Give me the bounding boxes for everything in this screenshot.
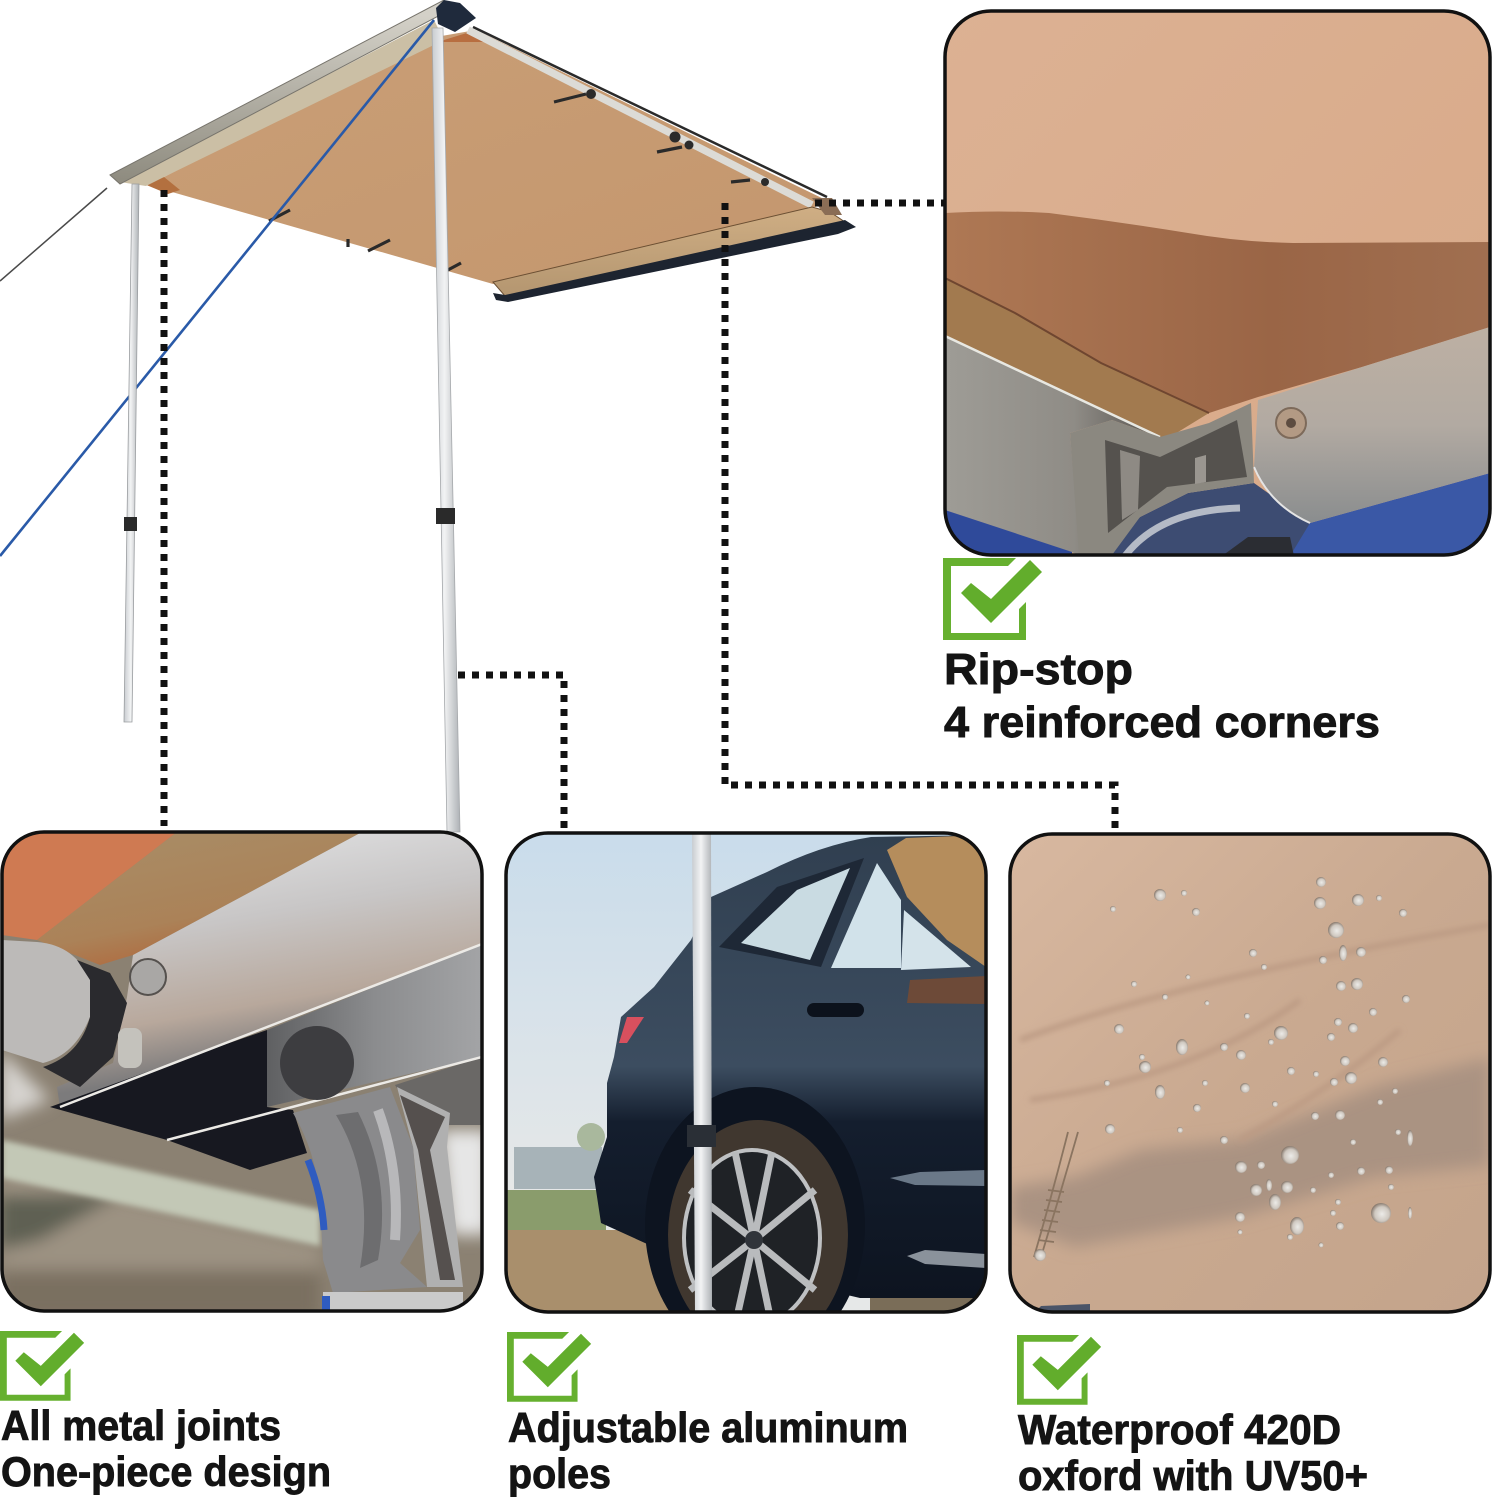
door reflection	[907, 976, 986, 1004]
bracket inner	[1105, 420, 1247, 533]
webbing band	[37, 832, 362, 965]
fabric shadow band	[1010, 1058, 1490, 1247]
side window front	[831, 863, 901, 968]
left pole	[124, 184, 139, 722]
side arm clamps	[586, 89, 769, 186]
panel: aluminium pole and car	[506, 833, 986, 1363]
bolt	[118, 1028, 142, 1068]
text: waterproof: Waterproof 420D	[1018, 1406, 1341, 1453]
corner bracket: far end	[812, 198, 842, 215]
rubber ring	[43, 960, 127, 1087]
hub	[745, 1231, 763, 1249]
tyre tread	[1226, 537, 1294, 554]
black underside	[50, 1030, 307, 1170]
tube	[1254, 327, 1490, 523]
panel: fabric corner	[945, 11, 1490, 556]
text: rip-stop: Rip-stop	[944, 645, 1133, 694]
rim	[684, 1150, 820, 1326]
dark knob	[280, 1026, 354, 1100]
clamp highlight	[378, 1110, 396, 1240]
hem	[945, 278, 1209, 440]
check icon: rip-stop	[943, 558, 1042, 640]
text: waterproof	[1018, 1406, 1368, 1499]
tube edge	[1254, 467, 1310, 523]
blurred background	[0, 1050, 490, 1320]
wheel arch	[645, 1087, 865, 1363]
hedge	[506, 1190, 606, 1232]
tube end	[2, 940, 90, 1063]
canvas corner patch: left	[144, 177, 180, 194]
text: metal joints: All metal joints	[1, 1402, 281, 1449]
canvas straps	[269, 94, 750, 271]
centre pole	[432, 28, 460, 832]
clamp body	[293, 1087, 427, 1293]
bottom edge shadow	[1035, 1304, 1090, 1312]
text: aluminium poles	[508, 1404, 908, 1497]
disc arc	[1125, 508, 1240, 556]
rear window frame	[719, 858, 864, 967]
body highlight	[890, 1170, 986, 1186]
fabric soft folds	[1020, 925, 1490, 1140]
dotted connector: middle panel	[458, 675, 564, 832]
screw	[130, 959, 166, 995]
blue background right	[1293, 474, 1488, 554]
rivet	[1276, 408, 1306, 438]
text: rip-stop: 4 reinforced corners	[944, 698, 1380, 747]
orange fabric	[2, 832, 177, 940]
car body	[594, 835, 986, 1298]
left pole clamp	[124, 517, 137, 531]
blue strap	[308, 1160, 324, 1230]
blue background left	[945, 510, 1072, 556]
ground	[506, 1230, 736, 1312]
fabric flap	[945, 212, 1490, 413]
pole clamp	[687, 1125, 716, 1147]
pale girder	[2, 1140, 320, 1246]
rolled front edge	[493, 207, 845, 296]
centre pole clamp	[436, 508, 455, 524]
clamp handle	[397, 1087, 463, 1287]
water droplets	[1034, 877, 1413, 1261]
clamp slot	[336, 1112, 382, 1268]
text: rip-stop	[944, 645, 1380, 747]
check icon: waterproof	[1017, 1335, 1101, 1405]
text: metal joints	[1, 1402, 331, 1495]
clamp handle inner	[400, 1095, 455, 1280]
right dark background	[395, 1057, 482, 1125]
rear window glass	[741, 868, 850, 960]
guy rope: thin	[0, 188, 107, 281]
tail light	[619, 1017, 644, 1043]
clamp base	[323, 1292, 463, 1310]
hem stitch	[945, 278, 1209, 413]
awning canvas	[144, 30, 830, 284]
canvas corner patch: top	[442, 32, 484, 42]
dotted connector: right panel	[725, 203, 1115, 828]
panel: waterproof fabric	[1010, 834, 1490, 1312]
pole	[692, 833, 712, 1312]
text: metal joints: One-piece design	[1, 1448, 331, 1495]
dotted connector: top right panel	[815, 200, 945, 206]
rail highlight	[945, 336, 1160, 437]
text: waterproof: oxford with UV50+	[1018, 1452, 1368, 1499]
sill highlight	[907, 1250, 986, 1268]
distant tree	[577, 1123, 605, 1151]
black strip under roller	[493, 220, 856, 302]
check icon: metal joints	[0, 1331, 84, 1401]
chrome disc	[1105, 483, 1310, 556]
dotted connector: left panel	[160, 190, 168, 826]
corner bracket: top	[436, 0, 476, 32]
main beam	[110, 0, 446, 184]
stitching	[1034, 1132, 1078, 1257]
side window rear	[901, 910, 971, 970]
lower aluminium plate	[267, 944, 482, 1107]
side arm	[468, 30, 812, 205]
distant building	[514, 1147, 602, 1189]
blue guy rope	[0, 20, 434, 556]
tyre	[668, 1120, 848, 1350]
bracket highlight	[1120, 450, 1140, 520]
text: aluminium poles: poles	[508, 1450, 611, 1497]
ground right	[870, 1296, 986, 1312]
far edge line	[473, 27, 827, 197]
panel: metal joints	[0, 832, 490, 1320]
awning illustration	[0, 0, 856, 832]
door handle	[807, 1003, 864, 1017]
wheel spokes	[690, 1152, 815, 1326]
text: aluminium poles: Adjustable aluminum	[508, 1404, 908, 1451]
upper aluminium beam	[57, 832, 482, 1108]
awning over car	[887, 835, 986, 967]
aluminium rail	[945, 336, 1160, 555]
bracket	[1070, 403, 1254, 555]
check icon: aluminium poles	[507, 1332, 591, 1402]
beam edge highlights	[60, 944, 482, 1140]
underside strip of main beam	[120, 20, 444, 186]
